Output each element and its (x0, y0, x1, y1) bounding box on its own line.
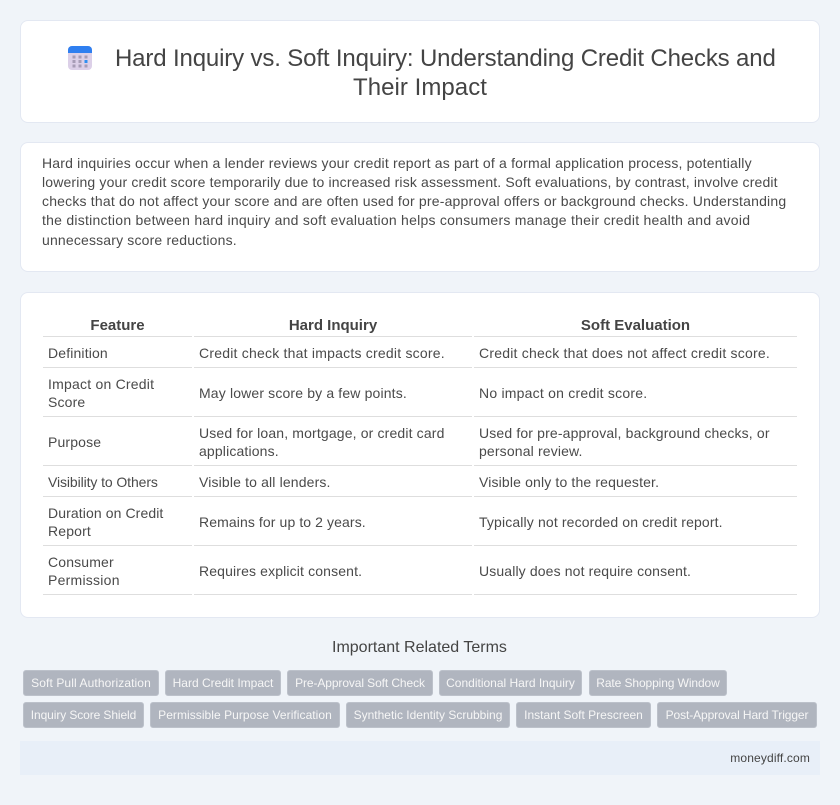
panel: comparison table (20, 292, 820, 618)
related terms tags: Rate Shopping Window (596, 676, 720, 690)
related terms tags: Hard Credit Impact (173, 676, 273, 690)
related terms tags: Inquiry Score Shield (31, 708, 136, 722)
comparison table: Permission (48, 572, 120, 588)
table header row: Feature (90, 317, 145, 334)
comparison table: Consumer (48, 554, 114, 570)
comparison table: Impact on Credit (48, 376, 154, 392)
footer source text: moneydiff.com (730, 751, 810, 765)
comparison table: Visible only to the requester. (479, 474, 659, 490)
comparison table: May lower score by a few points. (199, 385, 407, 401)
comparison table: Purpose (48, 434, 101, 450)
panel: title header (20, 20, 820, 123)
comparison table: Typically not recorded on credit report. (479, 514, 723, 530)
table header row: Hard Inquiry (289, 317, 377, 334)
related terms tags: Permissible Purpose Verification (158, 708, 332, 722)
comparison table: Definition (48, 345, 108, 361)
comparison table: Score (48, 394, 85, 410)
intro text block: the distinction between hard inquiry and soft evaluation helps consumers manage their credit health and avoid (42, 212, 750, 228)
comparison table: Requires explicit consent. (199, 563, 362, 579)
intro text block: unnecessary score reductions. (42, 232, 237, 248)
intro text block: lowering your credit score temporarily due to increased risk assessment. Soft evaluations, by contrast, involve credit (42, 174, 778, 190)
comparison table: Used for pre-approval, background checks, or (479, 425, 770, 441)
table header row (90, 317, 690, 334)
table header row: Soft Evaluation (581, 317, 690, 334)
related terms tags: Synthetic Identity Scrubbing (354, 708, 502, 722)
related terms tags: Pre-Approval Soft Check (295, 676, 425, 690)
comparison table: Remains for up to 2 years. (199, 514, 366, 530)
intro text block: checks that do not affect your score and are often used for pre-approval offers or background checks. Understanding (42, 193, 786, 209)
related terms tags: Soft Pull Authorization (31, 676, 151, 690)
intro text block: Hard inquiries occur when a lender reviews your credit report as part of a formal application process, potentially (42, 155, 752, 171)
title: Their Impact (353, 74, 487, 101)
comparison table: Credit check that does not affect credit score. (479, 345, 770, 361)
panel: intro (20, 142, 820, 272)
comparison table: personal review. (479, 443, 583, 459)
related terms tags (23, 670, 817, 728)
intro text block (42, 155, 786, 248)
related terms tags: Post-Approval Hard Trigger (666, 708, 808, 722)
comparison table: Usually does not require consent. (479, 563, 691, 579)
footer bar (20, 741, 820, 775)
comparison table: Duration on Credit (48, 505, 163, 521)
heading: important related terms: Important Related Terms (332, 639, 507, 656)
comparison table: Used for loan, mortgage, or credit card (199, 425, 445, 441)
icon: calendar (68, 46, 92, 70)
comparison table: Report (48, 523, 91, 539)
comparison table: Visibility to Others (48, 474, 158, 490)
title: Hard Inquiry vs. Soft Inquiry: Understanding Credit Checks and (115, 45, 776, 72)
comparison table: No impact on credit score. (479, 385, 647, 401)
comparison table: Visible to all lenders. (199, 474, 331, 490)
related terms tags: Conditional Hard Inquiry (446, 676, 575, 690)
comparison table: applications. (199, 443, 279, 459)
title (115, 45, 776, 101)
comparison table (43, 317, 797, 595)
comparison table: Credit check that impacts credit score. (199, 345, 445, 361)
related terms tags: Instant Soft Prescreen (524, 708, 643, 722)
